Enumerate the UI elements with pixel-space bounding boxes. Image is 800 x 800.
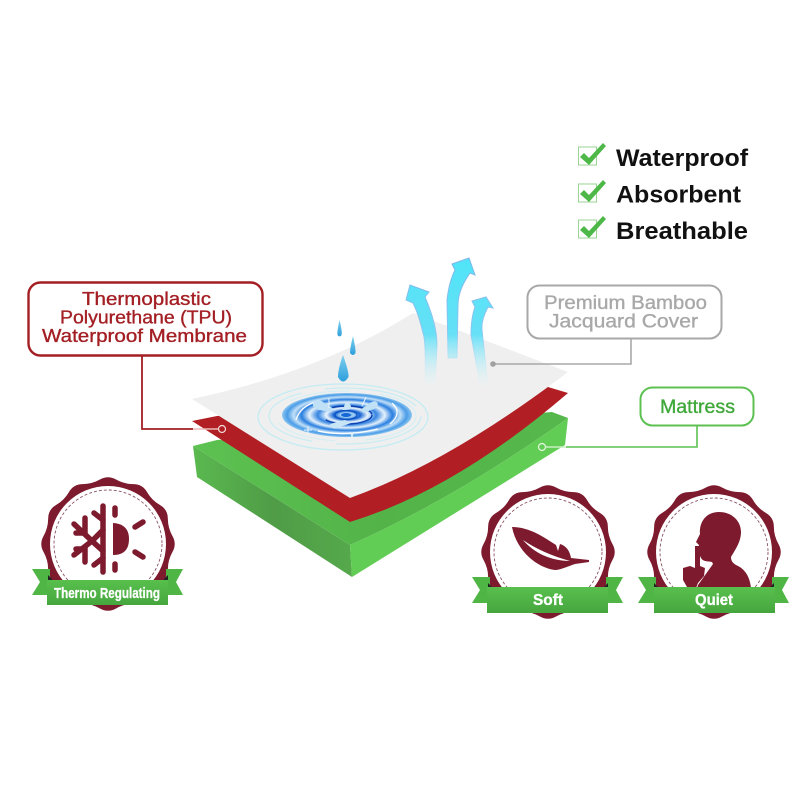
callout: TPU membrane: Waterproof Membrane	[42, 326, 247, 346]
water ripple	[258, 384, 428, 450]
icon: half snowflake and half sun	[74, 506, 143, 572]
falling water drops	[337, 320, 356, 382]
TPU waterproof membrane layer	[192, 387, 568, 522]
callout: TPU membrane: Thermoplastic	[82, 289, 211, 309]
badge: quiet: Quiet	[695, 592, 734, 609]
callout: bamboo cover: Jacquard Cover	[549, 312, 699, 332]
mattress layer	[193, 412, 568, 577]
badge: quiet	[638, 485, 789, 619]
callout: TPU membrane: Polyurethane (TPU)	[60, 308, 232, 328]
callout: mattress: Mattress	[660, 397, 735, 418]
icon: feather	[512, 527, 589, 570]
checklist item: Absorbent: Absorbent	[616, 182, 741, 208]
badge: soft	[472, 485, 623, 619]
checklist item: Waterproof: Waterproof	[616, 145, 749, 172]
callout: bamboo cover: Premium Bamboo	[544, 293, 707, 314]
checklist item: Breathable	[578, 216, 748, 245]
badge: thermo regulating: Thermo Regulating	[54, 585, 160, 602]
bamboo jacquard cover sheet	[192, 313, 568, 498]
layered mattress diagram	[192, 258, 568, 577]
callout: TPU membrane	[28, 282, 262, 432]
checklist: product benefits	[578, 143, 749, 245]
callout: mattress	[538, 388, 754, 450]
callout: bamboo cover	[490, 286, 722, 367]
icon: person with finger to lips	[683, 512, 751, 588]
rising air arrows	[406, 258, 493, 385]
badge: thermo regulating	[32, 477, 183, 611]
badge: soft: Soft	[533, 592, 564, 609]
checklist item: Breathable: Breathable	[616, 218, 748, 245]
